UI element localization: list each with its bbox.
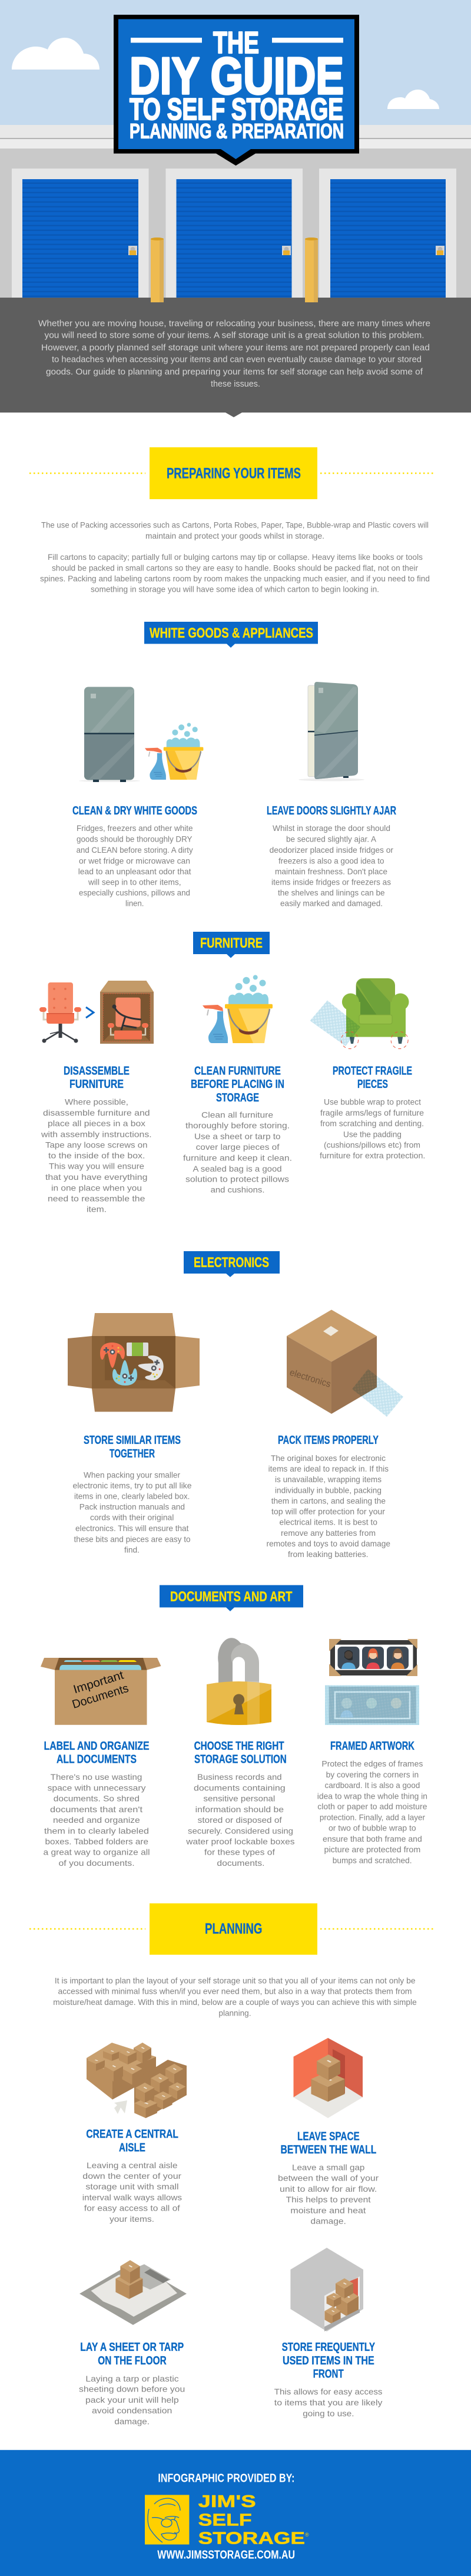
heading: preparing your items <box>29 447 436 499</box>
column: disassemble furniture: in one place when you <box>51 1183 142 1193</box>
section label: furniture <box>193 932 270 958</box>
footer background <box>0 2450 471 2576</box>
column: clean furniture: and cushions. <box>211 1185 265 1195</box>
column: pack items properly: remove any batteries from <box>281 1528 376 1538</box>
column: create a central aisle: down the center of your <box>82 2171 181 2181</box>
heading: planning <box>29 1904 436 1955</box>
column: disassemble furniture: FURNITURE <box>69 1078 124 1091</box>
column: clean and dry white goods: or wet fridge or microwave can <box>79 856 190 865</box>
icon: box of important documents: Important <box>72 1668 125 1696</box>
column: disassemble furniture: need to reassemble the <box>48 1193 145 1203</box>
column: lay a sheet or tarp: LAY A SHEET OR TARP <box>80 2341 184 2354</box>
icon: armchair with bubble wrap <box>310 978 409 1049</box>
column: framed artwork: FRAMED ARTWORK <box>330 1740 414 1753</box>
title line: TO SELF STORAGE: TO SELF STORAGE <box>130 93 343 127</box>
icon: framed artwork in bubble wrap <box>325 1686 419 1725</box>
column: choose the right storage solution: water proof lockable boxes <box>185 1836 294 1846</box>
column: clean furniture: furniture and keep it clean. <box>183 1153 292 1162</box>
icon: padlock <box>207 1638 271 1725</box>
column: pack items properly: remotes and toys to avoid damage <box>266 1539 390 1548</box>
title line: THE: THE <box>213 26 259 60</box>
text block: packing accessories: The use of Packing accessories such as Cartons, Porta Robes, Paper, Tape, Bubble-wrap and Plastic covers will <box>41 520 429 529</box>
column: store similar items together: electronic items, try to put all like <box>73 1480 192 1490</box>
column: choose the right storage solution: CHOOSE THE RIGHT <box>194 1740 284 1753</box>
heading: planning: PLANNING <box>205 1921 262 1937</box>
column: label and organize <box>44 1740 150 1868</box>
column: leave space between the wall <box>278 2130 379 2226</box>
intro text: to headaches when accessing your items and can even eventually cause damage to your stored <box>52 355 422 365</box>
logo: Jim's Self Storage <box>145 2492 309 2548</box>
bollard left <box>151 238 164 302</box>
panel: electronics <box>68 1251 403 1559</box>
column: choose the right storage solution: sensitive personal <box>203 1794 275 1803</box>
column: protect fragile pieces <box>320 1064 425 1160</box>
icon: framed artwork with corner protection <box>329 1639 417 1676</box>
title line: DIY GUIDE: DIY GUIDE <box>130 47 344 105</box>
column: label and organize: LABEL AND ORGANIZE <box>44 1740 150 1753</box>
column: lay a sheet or tarp <box>79 2341 185 2426</box>
panel: furniture <box>39 932 425 1214</box>
footer website: WWW.JIMSSTORAGE.COM.AU <box>157 2548 295 2561</box>
logo wordmark: STORAGE <box>198 2529 305 2548</box>
column: framed artwork: or two of bubble wrap to <box>329 1823 416 1833</box>
text block: packing accessories: Fill cartons to capacity; partially full or bulging cartons may tip or collapse. Heavy items like books or tools <box>48 552 423 562</box>
column: label and organize: them in to clearly labeled <box>44 1826 149 1835</box>
column: label and organize: of you documents. <box>59 1858 135 1868</box>
heading: preparing your items: PREPARING YOUR ITEMS <box>167 466 301 482</box>
intro text <box>38 318 430 389</box>
column: disassemble furniture: to the inside of the box. <box>48 1151 145 1160</box>
column: store similar items together <box>73 1434 192 1554</box>
column: store frequently used items: STORE FREQUENTLY <box>282 2341 376 2354</box>
column: label and organize: ALL DOCUMENTS <box>57 1753 137 1766</box>
column: label and organize: space with unnecessary <box>48 1783 145 1792</box>
column: leave space between the wall: unit to allow for air flow. <box>280 2184 377 2194</box>
panel: preparing your items <box>29 447 436 594</box>
icon: clean fridge with cleaning supplies <box>79 687 203 782</box>
column: lay a sheet or tarp: damage. <box>114 2416 150 2426</box>
column: store similar items together: TOGETHER <box>110 1447 155 1460</box>
column: choose the right storage solution: securely. Considered using <box>188 1826 293 1835</box>
icon: fridge with door ajar <box>298 682 364 781</box>
storage door 3 <box>319 169 456 301</box>
column: lay a sheet or tarp: Laying a tarp or plastic <box>85 2374 179 2383</box>
column: clean furniture: cover large pieces of <box>196 1142 280 1152</box>
icon: storage unit with boxes at front <box>290 2248 363 2331</box>
column: choose the right storage solution: documents containing <box>194 1783 286 1792</box>
intro text: you will need to store some of your items. A self storage unit is a great solution to this problem. <box>45 331 424 341</box>
column: clean furniture: thoroughly before storing. <box>185 1121 290 1130</box>
column: leave doors slightly ajar: be secured slightly ajar. A <box>286 835 377 844</box>
section label: documents and art <box>160 1585 303 1611</box>
column: framed artwork: cardboard. It is also a good <box>325 1780 420 1790</box>
intro text: Whether you are moving house, traveling or relocating your business, there are many times where <box>38 318 430 328</box>
panel: storefront hero <box>0 0 471 417</box>
column: clean furniture: Use a sheet or tarp to <box>194 1132 281 1141</box>
icon: bucket and spray <box>203 975 273 1043</box>
column: clean and dry white goods <box>72 804 197 908</box>
section label: electronics: ELECTRONICS <box>194 1255 269 1271</box>
column: clean and dry white goods: Fridges, freezers and other white <box>77 823 193 833</box>
section label: white goods <box>144 622 318 648</box>
column: create a central aisle: AISLE <box>119 2141 145 2154</box>
column: framed artwork: protection. Finally, add a layer <box>320 1812 425 1822</box>
column: protect fragile pieces: PIECES <box>357 1078 388 1091</box>
column: leave doors slightly ajar: the shelves and linings can be <box>278 888 385 897</box>
column: leave doors slightly ajar: Whilst in storage the door should <box>273 823 390 833</box>
sky <box>0 0 471 126</box>
column: clean furniture: Clean all furniture <box>201 1110 273 1119</box>
column: store frequently used items: to items that you are likely <box>274 2397 383 2407</box>
column: disassemble furniture: item. <box>87 1205 107 1214</box>
column: choose the right storage solution <box>185 1740 294 1868</box>
intro text: However, a poorly planned self storage unit where your items are not prepared properly can lead <box>41 342 430 352</box>
column: leave space between the wall: damage. <box>311 2217 346 2226</box>
icon: sealed box with bubble wrap <box>287 1310 403 1417</box>
column: disassemble furniture: that you have everything <box>45 1172 147 1182</box>
icon: office chair <box>39 982 81 1043</box>
column: disassemble furniture: Where possible, <box>65 1097 128 1107</box>
column: pack items properly: is unavailable, wrapping items <box>275 1475 382 1484</box>
column: create a central aisle: Leaving a central aisle <box>87 2161 178 2170</box>
column: store frequently used items: FRONT <box>313 2368 344 2381</box>
footer heading: INFOGRAPHIC PROVIDED BY: <box>158 2472 294 2485</box>
icon: box of important documents <box>41 1658 161 1725</box>
column: framed artwork: cloth or paper to add moisture <box>317 1802 427 1811</box>
icon: left cloud <box>12 38 99 70</box>
column: framed artwork: picture are protected from <box>324 1845 420 1854</box>
logo wordmark <box>198 2492 309 2548</box>
column: leave doors slightly ajar: freezers is also a good idea to <box>278 856 384 865</box>
column: store similar items together: items in one, clearly labeled box. <box>74 1491 190 1500</box>
text block: packing accessories: should be packed in small cartons so they are easy to handle. Books should be packed flat, not on their <box>52 563 418 572</box>
column: disassemble furniture: place all pieces in a box <box>48 1119 145 1128</box>
column: clean and dry white goods: CLEAN & DRY WHITE GOODS <box>72 804 197 817</box>
column: store similar items together: STORE SIMILAR ITEMS <box>84 1434 181 1447</box>
text block: planning intro <box>53 1976 417 2018</box>
column: store similar items together: electronics. This will ensure that <box>75 1523 188 1533</box>
icon: sealed box with bubble wrap: electronics <box>288 1368 332 1390</box>
column: choose the right storage solution: for these types of <box>204 1848 275 1857</box>
column: clean and dry white goods: linen. <box>125 898 144 908</box>
column: pack items properly: electrical items. It is best to <box>279 1518 377 1527</box>
column: lay a sheet or tarp: ON THE FLOOR <box>98 2354 167 2367</box>
column: lay a sheet or tarp: pack your unit will help <box>85 2395 179 2405</box>
bollard right <box>305 238 318 302</box>
logo wordmark: ® <box>305 2532 309 2538</box>
column: store frequently used items <box>274 2341 383 2418</box>
title banner <box>114 15 359 166</box>
text block: packing accessories: maintain and protect your goods whilst in storage. <box>145 531 324 540</box>
logo wordmark: SELF <box>198 2511 252 2529</box>
column: framed artwork: bumps and scratched. <box>333 1855 412 1865</box>
column: lay a sheet or tarp: avoid condensation <box>92 2406 172 2415</box>
column: create a central aisle: your items. <box>110 2214 154 2224</box>
column: store frequently used items: USED ITEMS IN THE <box>283 2354 374 2367</box>
column: store frequently used items: going to use. <box>303 2409 354 2418</box>
text block: planning intro: moisture/heat damage. With this in mind, below are a couple of ways you can achieve this with simple <box>53 1997 417 2007</box>
column: create a central aisle <box>82 2128 182 2224</box>
column: leave space between the wall: LEAVE SPACE <box>297 2130 360 2143</box>
column: pack items properly: them in cartons, and sealing the <box>271 1496 386 1505</box>
column: label and organize: documents that aren't <box>50 1805 142 1814</box>
icon: box on tarp <box>79 2260 187 2325</box>
arrow: chevron to box <box>86 1007 94 1018</box>
panel: documents and art <box>41 1585 427 1868</box>
column: leave doors slightly ajar <box>267 804 396 908</box>
column: choose the right storage solution: STORAGE SOLUTION <box>194 1753 287 1766</box>
text block: planning intro: planning. <box>218 2008 251 2018</box>
column: leave space between the wall: moisture and heat <box>290 2205 366 2215</box>
column: framed artwork: idea to wrap the whole thing in <box>317 1791 427 1800</box>
panel: footer <box>0 2450 471 2576</box>
column: store similar items together: find. <box>124 1545 140 1554</box>
text block: packing accessories: spines. Packing and labeling cartons room by room makes the unpacking much easier, and if you need to find <box>40 574 430 583</box>
column: pack items properly: items are ideal to repack in. If this <box>268 1464 389 1473</box>
icon: right cloud <box>387 90 439 109</box>
column: label and organize: There's no use wasting <box>51 1772 142 1782</box>
icon: box of important documents: Documents <box>71 1682 130 1711</box>
column: protect fragile pieces: Use bubble wrap to protect <box>324 1097 421 1107</box>
column: protect fragile pieces: Use the padding <box>343 1129 402 1139</box>
column: choose the right storage solution: Business records and <box>197 1772 282 1782</box>
column: leave doors slightly ajar: easily marked and damaged. <box>280 898 383 908</box>
column: clean furniture <box>183 1064 292 1195</box>
intro text: goods. Our guide to planning and preparing your items for self storage can help avoid some of <box>46 367 423 377</box>
column: disassemble furniture: This way you will ensure <box>49 1162 144 1171</box>
column: protect fragile pieces: from scratching and denting. <box>320 1119 424 1128</box>
column: disassemble furniture: with assembly instructions. <box>41 1129 152 1139</box>
building wall <box>0 125 471 302</box>
column: label and organize: needed and organize <box>53 1815 140 1825</box>
column: protect fragile pieces: furniture for extra protection. <box>320 1151 425 1160</box>
column: leave space between the wall: This helps to prevent <box>286 2195 371 2204</box>
column: leave doors slightly ajar: deodorizer placed inside fridges or <box>270 845 393 855</box>
column: clean and dry white goods: especially cushions, pillows and <box>79 888 190 897</box>
column: protect fragile pieces: PROTECT FRAGILE <box>333 1064 412 1077</box>
column: clean and dry white goods: and CLEAN before storing. A dirty <box>77 845 193 855</box>
column: clean and dry white goods: lead to an unpleasant odor that <box>78 866 191 876</box>
storage door 1 <box>12 169 148 301</box>
logo wordmark: JIM'S <box>198 2492 256 2511</box>
column: framed artwork <box>317 1740 427 1865</box>
section label: white goods: WHITE GOODS & APPLIANCES <box>150 625 313 641</box>
column: store frequently used items: This allows for easy access <box>274 2387 383 2396</box>
column: clean furniture: A sealed bag is a good <box>193 1164 282 1173</box>
text block: planning intro: accessed with minimal fuss when/if you ever need them, but also in a way that protects them from <box>58 1987 412 1996</box>
column: disassemble furniture: Tape any loose screws on <box>45 1140 148 1150</box>
column: leave space between the wall: Leave a small gap <box>292 2163 365 2172</box>
column: leave doors slightly ajar: maintain freshness. Don't place <box>275 866 387 876</box>
icon: open box with controllers <box>68 1313 200 1412</box>
column: framed artwork: Protect the edges of frames <box>321 1759 423 1769</box>
column: leave space between the wall: BETWEEN THE WALL <box>280 2143 376 2156</box>
column: protect fragile pieces: (cushions/pillows etc) from <box>324 1140 420 1150</box>
column: pack items properly: individually in bubble, packing <box>275 1485 382 1495</box>
column: pack items properly: top will offer protection for your <box>271 1506 385 1516</box>
column: leave doors slightly ajar: LEAVE DOORS SLIGHTLY AJAR <box>267 804 396 817</box>
column: leave space between the wall: between the wall of your <box>278 2173 379 2183</box>
panel: white goods and appliances <box>72 622 396 908</box>
column: clean furniture: BEFORE PLACING IN <box>191 1078 284 1091</box>
column: pack items properly: The original boxes for electronic <box>271 1453 386 1463</box>
text block: packing accessories: something in storage you will have some idea of which carton to begin looking in. <box>91 585 379 594</box>
icon: boxes with central aisle <box>87 2043 187 2118</box>
section label: documents and art: DOCUMENTS AND ART <box>170 1589 293 1605</box>
icon: box standing away from wall <box>293 2038 363 2118</box>
column: clean and dry white goods: goods should be thoroughly DRY <box>77 835 193 844</box>
column: store similar items together: When packing your smaller <box>84 1470 180 1479</box>
column: choose the right storage solution: information should be <box>195 1805 284 1814</box>
panel: planning <box>29 1904 436 2426</box>
section label: electronics <box>184 1251 280 1277</box>
column: framed artwork: ensure that both frame and <box>323 1834 422 1843</box>
section label: furniture: FURNITURE <box>200 935 263 951</box>
column: store similar items together: Pack instruction manuals and <box>79 1502 185 1512</box>
column: create a central aisle: for easy access to all of <box>84 2203 180 2212</box>
text block: planning intro: It is important to plan the layout of your self storage unit so that you all of your items can not only be <box>55 1976 416 1985</box>
column: clean furniture: CLEAN FURNITURE <box>194 1064 281 1077</box>
column: protect fragile pieces: fragile arms/legs of furniture <box>320 1108 424 1117</box>
column: store similar items together: these bits and pieces are easy to <box>74 1534 191 1543</box>
text block: packing accessories <box>40 520 430 594</box>
column: pack items properly: from leaking batteries. <box>288 1549 369 1559</box>
column: pack items properly: PACK ITEMS PROPERLY <box>278 1434 379 1447</box>
column: choose the right storage solution: documents. <box>217 1858 265 1868</box>
column: lay a sheet or tarp: sheeting down before you <box>79 2384 185 2394</box>
column: leave doors slightly ajar: items inside fridges or freezers as <box>271 877 391 886</box>
column: clean furniture: solution to protect pillows <box>185 1175 289 1184</box>
logo portrait <box>145 2495 189 2545</box>
column: create a central aisle: CREATE A CENTRAL <box>86 2128 178 2141</box>
column: create a central aisle: interval walk ways allows <box>82 2192 182 2202</box>
column: disassemble furniture: disassemble furniture and <box>43 1108 150 1117</box>
column: framed artwork: by covering the corners in <box>326 1770 419 1779</box>
column: disassemble furniture: DISASSEMBLE <box>64 1064 130 1077</box>
column: label and organize: documents. So shred <box>54 1794 140 1803</box>
title line: PLANNING & PREPARATION: PLANNING & PREPARATION <box>130 120 344 143</box>
column: clean furniture: STORAGE <box>216 1091 259 1104</box>
column: store similar items together: cords with their original <box>90 1513 174 1522</box>
column: clean and dry white goods: will seep in to other items, <box>88 877 181 886</box>
column: label and organize: a great way to organize all <box>44 1848 150 1857</box>
column: pack items properly <box>266 1434 390 1559</box>
column: choose the right storage solution: stored or disposed of <box>198 1815 282 1825</box>
column: label and organize: boxes. Tabbed folders are <box>45 1836 148 1846</box>
dark intro band <box>0 298 471 417</box>
intro text: these issues. <box>211 379 260 389</box>
storage door 2 <box>166 169 303 301</box>
icon: chair packed in box <box>100 981 154 1044</box>
column: create a central aisle: storage unit with small <box>85 2182 179 2191</box>
column: disassemble furniture <box>41 1064 152 1214</box>
